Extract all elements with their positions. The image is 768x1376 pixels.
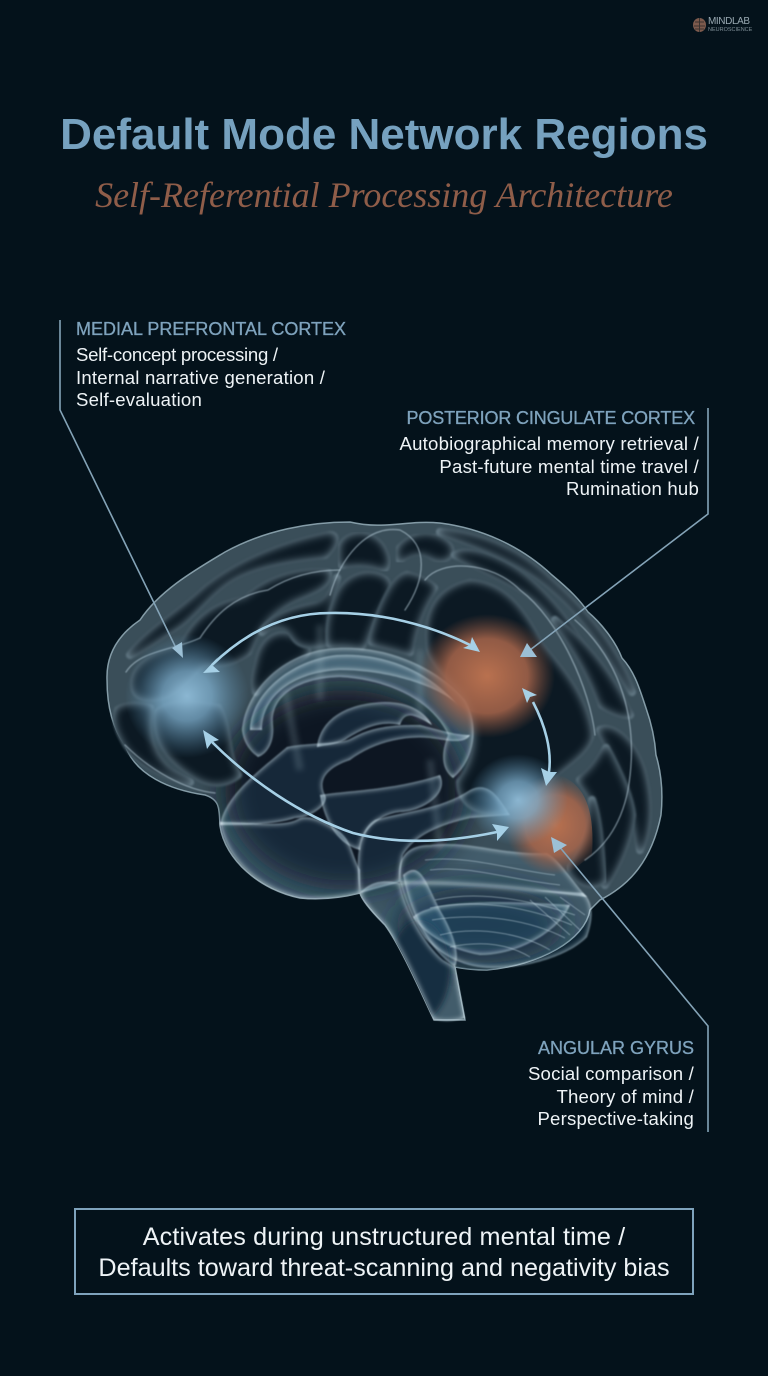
label: angular gyrus: ANGULAR GYRUS (538, 1038, 694, 1058)
label: medial prefrontal cortex (76, 319, 346, 410)
label: posterior cingulate cortex: POSTERIOR CINGULATE CORTEX (407, 408, 695, 428)
glow: posterior cingulate cortex (419, 614, 555, 738)
label: angular gyrus: Social comparison / (528, 1063, 694, 1084)
label: posterior cingulate cortex: Rumination hub (566, 478, 699, 499)
callout (74, 1208, 694, 1295)
label: angular gyrus: Theory of mind / (556, 1086, 694, 1106)
callout: Defaults toward threat-scanning and negativity bias (98, 1254, 670, 1282)
logo: NEUROSCIENCE (708, 27, 752, 33)
gyri: cortical folds (117, 532, 648, 885)
glow: angular gyrus orange (508, 778, 592, 872)
glow: angular gyrus blue (468, 754, 568, 846)
label: posterior cingulate cortex: Past-future mental time travel / (439, 456, 699, 476)
cerebellum folia (425, 859, 585, 957)
callout: Activates during unstructured mental time / (143, 1223, 625, 1251)
logo: MINDLAB (708, 16, 750, 27)
label: posterior cingulate cortex (400, 408, 699, 499)
crisp highlight ridges (125, 530, 631, 860)
brain silhouette (107, 522, 662, 1020)
leader lines (60, 320, 708, 1132)
soft vertical ridges (285, 625, 440, 850)
icon: brain logo (693, 18, 706, 32)
connection arrows (212, 613, 550, 841)
brain illustration (59, 320, 709, 1132)
brain body (107, 522, 662, 1021)
gyri: temporal and deep structures (220, 648, 592, 1021)
glow: medial prefrontal cortex (125, 634, 249, 758)
label: medial prefrontal cortex: MEDIAL PREFRONTAL CORTEX (76, 319, 346, 339)
subtitle: Self-Referential Processing Architecture (95, 175, 673, 215)
label: posterior cingulate cortex: Autobiographical memory retrieval / (400, 433, 699, 454)
label: angular gyrus: Perspective-taking (537, 1108, 694, 1129)
label: medial prefrontal cortex: Internal narrative generation / (76, 366, 325, 388)
label: medial prefrontal cortex: Self-evaluation (76, 389, 202, 410)
label: medial prefrontal cortex: Self-concept processing / (76, 344, 278, 365)
title: Default Mode Network Regions (60, 110, 708, 159)
dark core behind deep structures (225, 690, 565, 1020)
logo (693, 16, 752, 33)
label: angular gyrus (528, 1038, 694, 1129)
